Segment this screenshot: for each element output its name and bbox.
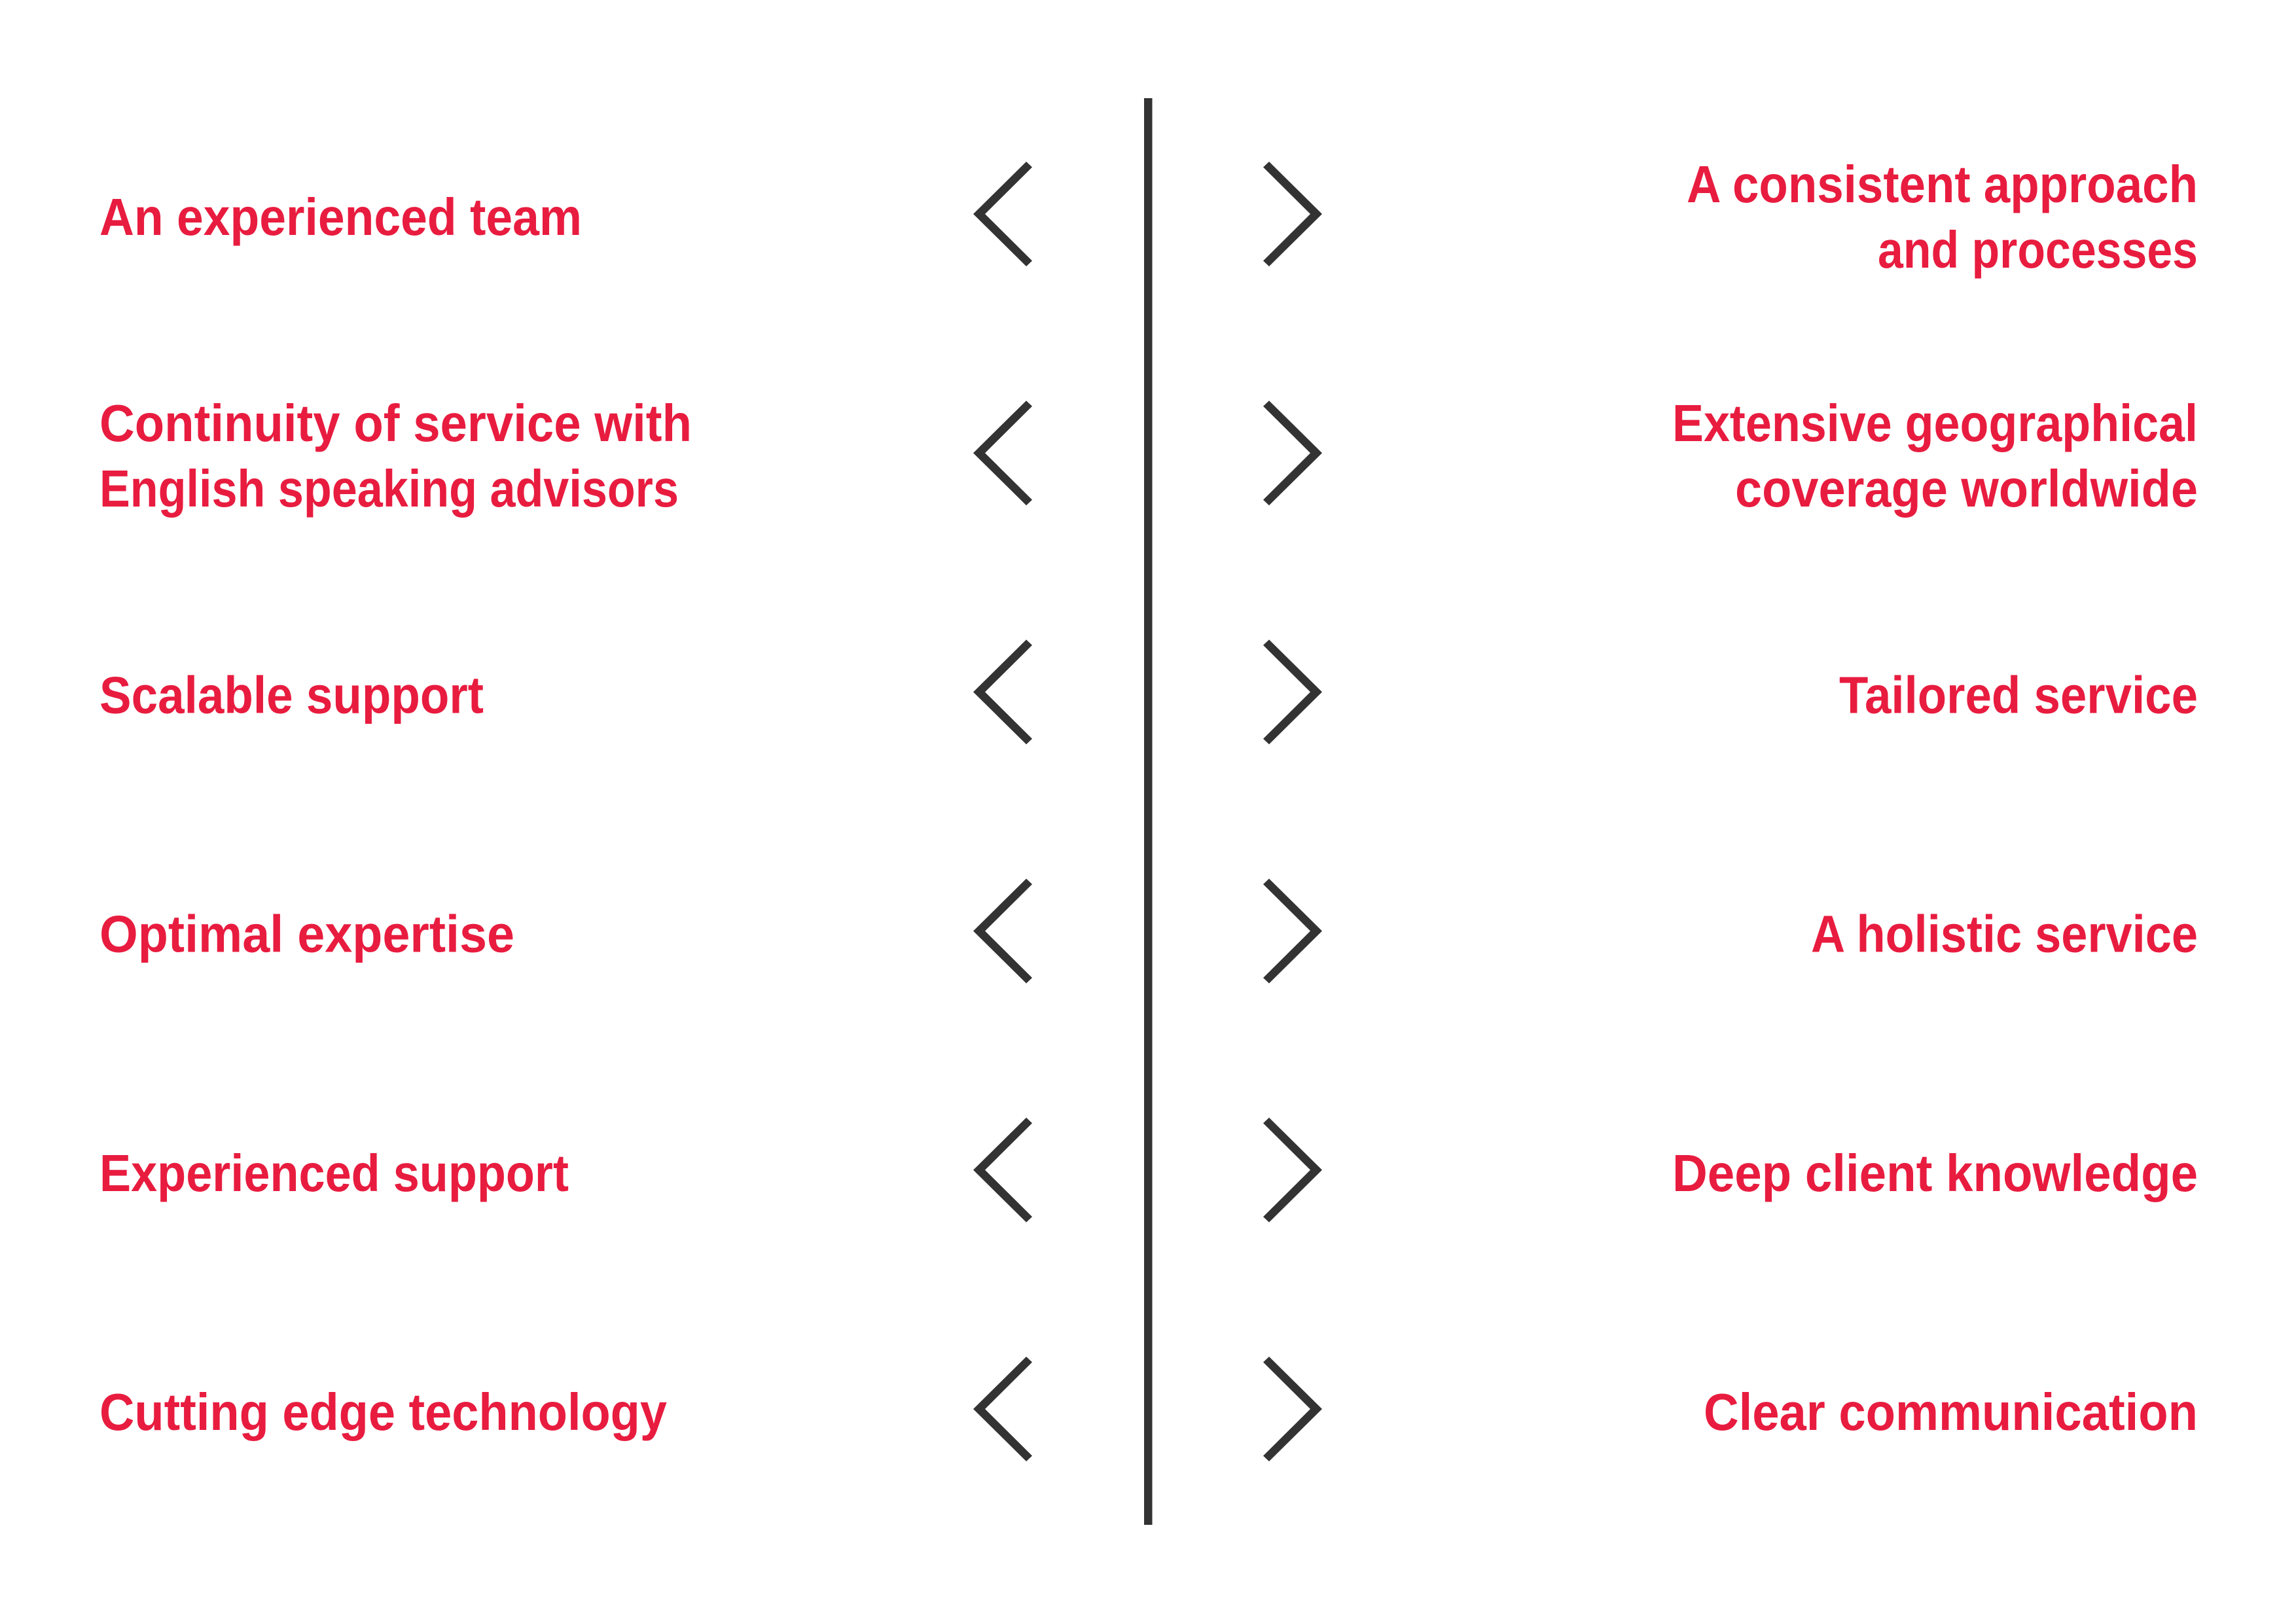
- right text: A consistent approach: and processes: [1878, 221, 2198, 279]
- right chevrons column: [1263, 162, 1322, 1461]
- icon: left chevron 1: [973, 162, 1032, 266]
- left text: Cutting edge technology: Cutting edge technology: [99, 1383, 667, 1441]
- left text: Continuity of service: [99, 394, 692, 518]
- icon: right chevron 3: [1263, 639, 1322, 744]
- icon: left chevron 4: [973, 879, 1032, 984]
- icon: left chevron 5: [973, 1118, 1032, 1222]
- left text: Experienced support: Experienced support: [99, 1144, 569, 1202]
- right text: A consistent approach: [1687, 155, 2198, 279]
- icon: right chevron 1: [1263, 162, 1322, 266]
- icon: left chevron 3: [973, 639, 1032, 744]
- left text: Continuity of service: Continuity of service with: [99, 394, 692, 452]
- left text: Scalable support: Scalable support: [99, 666, 484, 724]
- left chevrons column: [973, 162, 1032, 1461]
- icon: right chevron 2: [1263, 401, 1322, 505]
- right text: A consistent approach: A consistent approach: [1687, 155, 2198, 213]
- right text: Extensive geographical: coverage worldwide: [1735, 459, 2198, 518]
- central vertical divider: [1144, 98, 1152, 1525]
- right text: Deep client knowledge: Deep client knowledge: [1672, 1144, 2198, 1202]
- right text: Tailored service: Tailored service: [1839, 666, 2198, 724]
- right column of benefits: [1672, 155, 2198, 1441]
- icon: left chevron 2: [973, 401, 1032, 505]
- right text: A holistic service: A holistic service: [1811, 905, 2198, 963]
- right text: Clear communication: Clear communication: [1704, 1383, 2198, 1441]
- left text: An experienced team: An experienced team: [99, 188, 582, 246]
- right text: Extensive geographical: Extensive geographical: [1672, 394, 2198, 452]
- left column of benefits: [99, 188, 692, 1441]
- right text: Extensive geographical: [1672, 394, 2198, 518]
- icon: left chevron 6: [973, 1357, 1032, 1461]
- left text: Optimal expertise: Optimal expertise: [99, 905, 514, 963]
- icon: right chevron 5: [1263, 1118, 1322, 1222]
- icon: right chevron 4: [1263, 879, 1322, 984]
- icon: right chevron 6: [1263, 1357, 1322, 1461]
- left text: Continuity of service: English speaking advisors: [99, 459, 679, 518]
